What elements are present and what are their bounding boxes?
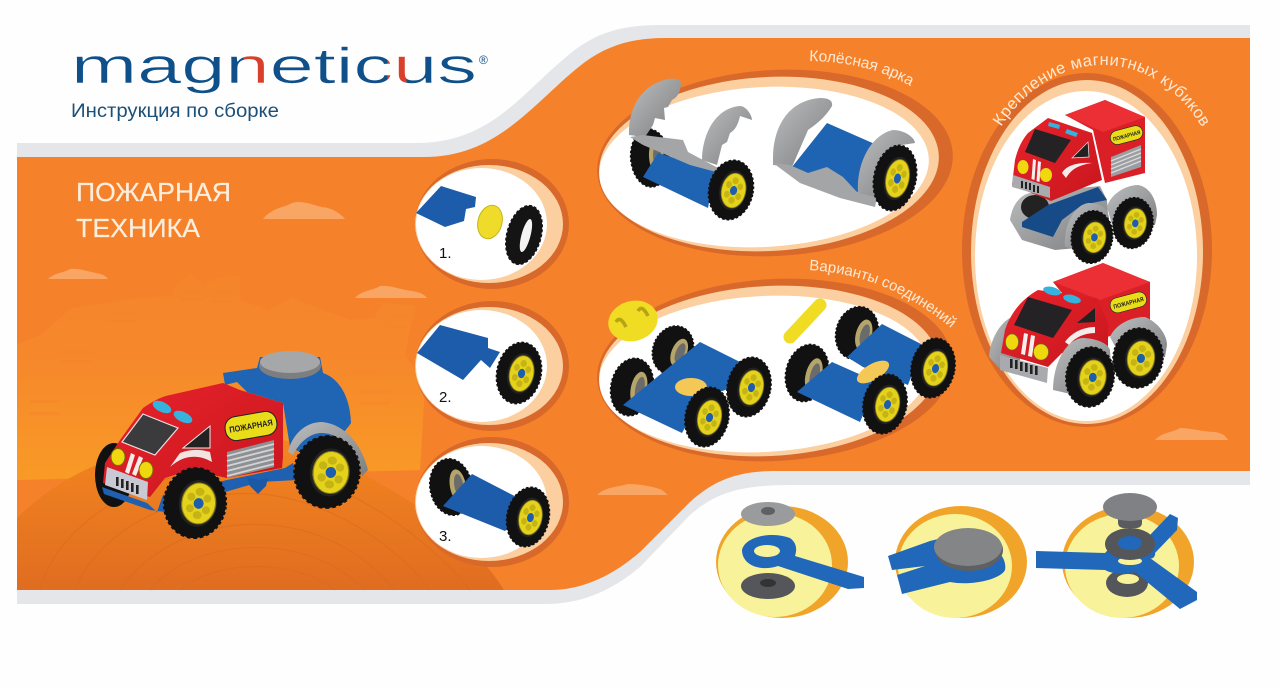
wheel [868, 141, 922, 215]
far wheel [425, 455, 477, 519]
lower hole [760, 579, 776, 587]
near wheel [501, 483, 555, 551]
front fender [858, 130, 915, 197]
subtitle: Инструкция по сборке [71, 101, 279, 122]
bumper slots [1010, 359, 1038, 375]
white interior [975, 91, 1197, 421]
step 2 panel [415, 301, 569, 431]
arm hole [754, 545, 780, 557]
magnet step 2 [888, 506, 1027, 618]
inner wheel [1021, 195, 1049, 219]
headlight 2 [139, 462, 153, 478]
panel: magnetic cubes [962, 73, 1212, 427]
white interior [416, 446, 547, 558]
tire [500, 202, 548, 268]
side label: ПОЖАРНАЯ [1113, 297, 1144, 311]
side label [1109, 290, 1148, 314]
yellow connector bar [790, 305, 820, 337]
far front wheel [95, 443, 133, 507]
front grille slots [116, 477, 139, 494]
stripes [1032, 159, 1041, 182]
back arch [773, 98, 832, 167]
red cabin [1012, 118, 1102, 201]
stripes [1021, 333, 1035, 357]
clouds [48, 202, 1228, 495]
cube top [1065, 100, 1145, 132]
blue plate [416, 186, 476, 227]
blue plates [623, 342, 740, 433]
windshield [1025, 129, 1071, 163]
yellow face [898, 514, 1012, 618]
windshield [122, 414, 178, 455]
step 1 panel [415, 159, 569, 289]
yellow oval [853, 356, 893, 388]
blue three-arm [1036, 514, 1197, 609]
logo: magneticus: magneticus [71, 38, 477, 94]
heading: fire vehicles: ТЕХНИКА [76, 213, 201, 243]
side vent [227, 440, 274, 478]
washer hole [1118, 536, 1142, 550]
side peg [247, 477, 268, 494]
peach ring [595, 277, 943, 465]
back arch [629, 79, 681, 137]
roof light 2 [172, 408, 194, 426]
top magnet stem [1118, 515, 1142, 528]
white interior [595, 78, 933, 256]
blue plate [417, 325, 500, 380]
grey fender [288, 422, 368, 476]
arm hole [1118, 557, 1142, 565]
left assembly [628, 79, 759, 224]
grey bumper [1000, 355, 1048, 383]
city silhouette background [17, 273, 425, 480]
yellow label: ПОЖАРНАЯ [228, 417, 274, 435]
heading: fire vehicles [76, 177, 231, 243]
headlight 2 [1034, 344, 1048, 360]
right assembly [773, 98, 922, 215]
cabin side swoosh [170, 450, 212, 467]
peach ring [595, 68, 943, 260]
side window [183, 426, 210, 448]
peach ring [971, 80, 1203, 424]
step number: 1. [439, 245, 452, 262]
front fender [1053, 338, 1112, 395]
left fender [989, 317, 1020, 372]
yellow hub [474, 202, 506, 242]
roof lights [151, 398, 173, 416]
front fender [1065, 203, 1110, 250]
red cabin [103, 383, 283, 497]
front wheel [703, 156, 759, 224]
main fire truck illustration [95, 351, 368, 542]
left fender base [1010, 186, 1110, 250]
hood stripes [125, 453, 143, 476]
washer [1105, 528, 1155, 560]
front arch [702, 106, 752, 165]
grey base [773, 163, 877, 207]
blue plate [443, 474, 532, 531]
top magnet [1103, 493, 1157, 521]
label: wheel arch: Колёсная арка [810, 50, 913, 86]
blue plate [792, 123, 877, 193]
blue chassis [102, 463, 297, 512]
back wheel [628, 127, 672, 189]
yellow label [223, 410, 279, 442]
red cube [1053, 263, 1150, 340]
grey bar [630, 135, 718, 172]
grey cap [260, 351, 320, 373]
side window [1077, 308, 1095, 323]
lower hole [1117, 574, 1139, 584]
yellow oval [675, 378, 707, 396]
roof lights [1042, 285, 1062, 297]
vent [1111, 145, 1141, 177]
headlights [111, 448, 125, 466]
cabin swoosh [1062, 163, 1092, 178]
roof light 2 [1062, 293, 1082, 305]
heading: fire vehicles: ПОЖАРНАЯ [76, 177, 231, 207]
lower magnet [1106, 569, 1148, 597]
vent lines [1111, 149, 1141, 173]
rear fender [1110, 317, 1167, 365]
magnet step 1 [716, 502, 864, 618]
side label [1109, 124, 1144, 146]
panel: wheel arch [592, 61, 958, 265]
red cube [1065, 100, 1145, 183]
top disc [934, 528, 1002, 566]
wheel [491, 338, 547, 408]
rear wheel [290, 432, 364, 512]
registered mark: ® [479, 53, 488, 67]
headlight 2 [1040, 168, 1052, 182]
side window [1072, 142, 1089, 158]
label: magnetic cubes mount: Крепление магнитных кубиков [992, 56, 1208, 126]
blue floor [1022, 187, 1107, 237]
cube top [1053, 263, 1150, 300]
orange main panel [17, 38, 1250, 590]
top disc shadow [935, 529, 1003, 571]
peach ring [415, 443, 563, 561]
blue plates [797, 362, 877, 422]
yellow connector disc [604, 295, 662, 347]
peach ring [415, 307, 563, 425]
grey bumper [1012, 175, 1050, 198]
white interior [416, 168, 547, 280]
red cabin [1001, 290, 1108, 367]
left wheels and plates [605, 320, 776, 451]
headlights [1006, 334, 1018, 350]
step number: 3. [439, 528, 452, 545]
blue tank [223, 357, 351, 452]
label: connection variants: Варианты соединений [810, 260, 958, 328]
peach ring [415, 165, 563, 283]
white interior [416, 310, 547, 422]
yellow face [718, 513, 832, 617]
cabin swoosh [1065, 327, 1095, 345]
washer hole [761, 507, 775, 515]
headlights [1018, 160, 1028, 174]
grille slots [1021, 181, 1039, 193]
truck with lifted cube [1010, 100, 1157, 266]
white interior [595, 287, 933, 461]
right wheels and plates [779, 302, 960, 438]
front wheel [160, 464, 230, 542]
grey bumper [105, 467, 148, 500]
windshield [1014, 297, 1072, 338]
roof lights [1048, 122, 1078, 137]
top washer [741, 502, 795, 526]
lower magnet [741, 573, 795, 599]
grey cap rim [259, 353, 321, 379]
blue fork [888, 533, 1005, 594]
blue plate [643, 153, 715, 208]
assembled truck [989, 263, 1167, 410]
blue arm [742, 535, 864, 589]
yellow face [1065, 514, 1179, 618]
logo: magneticus [71, 38, 488, 94]
magnet step 3 [1036, 493, 1197, 618]
step 3 panel [415, 437, 569, 567]
hill with wood-grain lines [17, 436, 504, 590]
panel: connection variants [592, 270, 960, 470]
rear fender [1107, 185, 1157, 235]
side label: ПОЖАРНАЯ [1113, 130, 1141, 143]
step number: 2. [439, 389, 452, 406]
